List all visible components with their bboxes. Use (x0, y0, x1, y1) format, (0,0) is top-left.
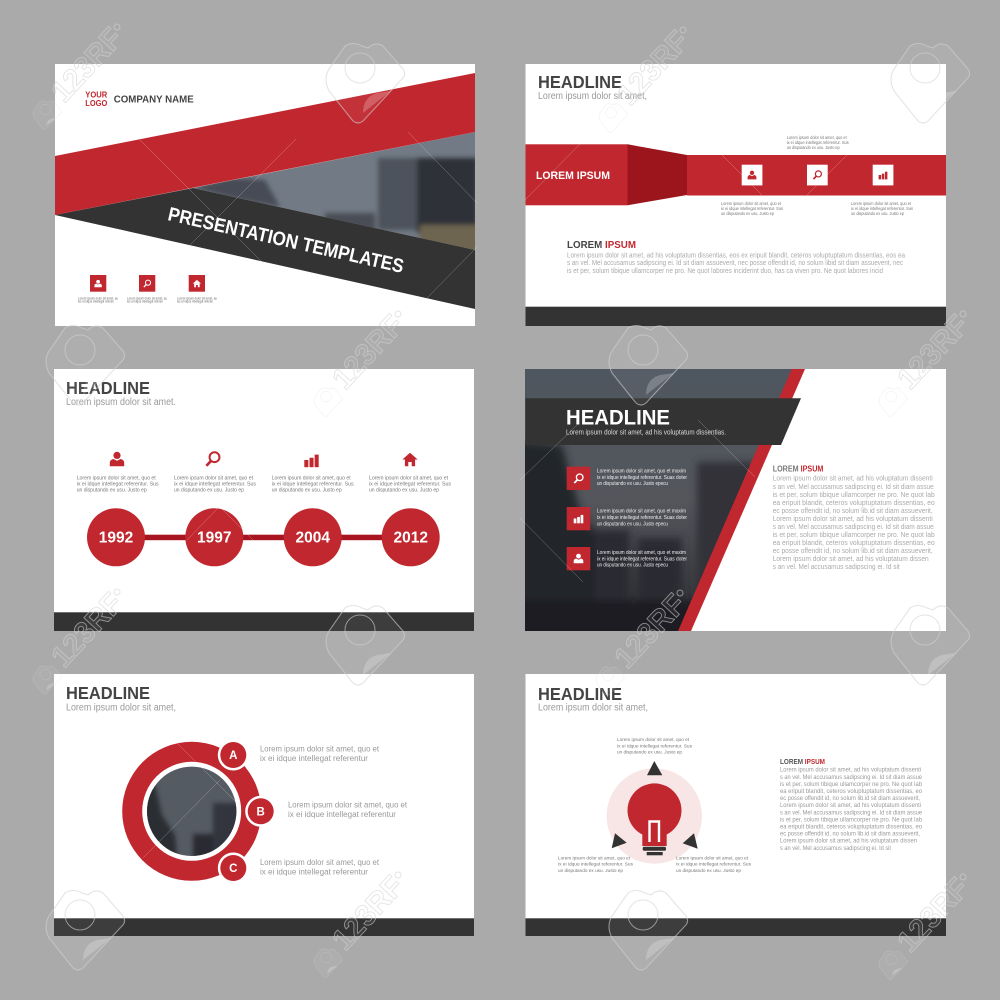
watermark: stock logo text: 123RF (891, 872, 975, 959)
lower caption right: un disputando ex usu. Justo ep (851, 211, 905, 216)
logo: YOUR (85, 90, 107, 100)
body paragraph (773, 476, 935, 571)
badge A (218, 740, 249, 770)
cover captions: Lorem ipsum dolor sit amet, au (177, 296, 217, 300)
captions: ix ei idque intellegat referentur. Sus (174, 482, 256, 488)
panel: cover slide (55, 64, 480, 326)
icon: search tile (567, 467, 590, 490)
bottom left caption: Lorem ipsum dolor sit amet, quo et (558, 855, 631, 861)
top caption: un disputando ex usu. Justo ep (787, 145, 840, 150)
body paragraph: ea eripuit blandit, ceteros voluptuptatum dissentias, eo (780, 789, 923, 795)
subtitle: Lorem ipsum dolor sit amet, (66, 703, 176, 714)
list captions: ix ei idque intellegat referentur. Suas doter (597, 556, 687, 562)
icon: home tile (189, 275, 205, 292)
headline: HEADLINE (66, 683, 150, 703)
body paragraph: ea eripuit blandit, ceteros voluptuptatum dissentias, eo (773, 500, 935, 507)
pale circle (607, 768, 702, 864)
body paragraph: Lorem ipsum dolor sit amet, ad his voluptatum dissentias, eos ex eripuit blandit, ceteros voluptuptatum dissentias, eos ea (567, 252, 905, 260)
white inner ring (142, 762, 241, 861)
icon: chart (304, 455, 319, 467)
text C (260, 858, 380, 877)
cover captions: ius et idque intellegat referen (127, 300, 163, 304)
captions: ix ei idque intellegat referentur. Sus (272, 482, 354, 488)
dark banner (526, 398, 801, 445)
list captions: Lorem ipsum dolor sit amet, quo et maxim (597, 509, 686, 515)
watermark: stock logo text: 123RF (611, 25, 695, 112)
body paragraph: s an vel. Mel accusamus sadipscing ei. Id sit diam assueverit, nec posse offendit id, no solum libid sit diam assueverit, nec (567, 260, 903, 267)
text C: ix ei idque intellegat referentur (260, 868, 368, 877)
badge C: C (229, 863, 237, 875)
list captions: Lorem ipsum dolor sit amet, quo et maxim (597, 469, 686, 475)
body paragraph: ea eripuit blandit, ceteros voluptuptatum dissentias, eo (780, 824, 923, 830)
body paragraph: ec posse offendit id, no solum lib.id sit diam assueverit, (780, 832, 920, 838)
captions: ix ei idque intellegat referentur. Sus (369, 482, 451, 488)
body paragraph: ec posse offendit id, no solum lib.id sit diam assueverit, (773, 508, 933, 515)
headline: HEADLINE (66, 378, 150, 398)
body paragraph: Lorem ipsum dolor sit amet, ad his voluptatum dissenti (780, 803, 921, 809)
red band (687, 155, 946, 196)
circular photo (147, 766, 236, 856)
body paragraph: s an vel. Mel accusamus sadipscing ei. Id sit (780, 846, 891, 852)
section heading: LOREM IPSUM (780, 759, 825, 766)
bottom right caption: un disputando ex usu. Justo ep (676, 868, 741, 874)
captions: un disputando ex usu. Justo ep (174, 488, 244, 494)
subtitle: Lorem ipsum dolor sit amet, ad his voluptatum dissentias. (566, 427, 726, 436)
top caption: un disputando ex usu. Justo ep (617, 750, 682, 756)
icon: person tile (90, 275, 106, 292)
badge B (245, 796, 276, 827)
watermark: stock logo text: 123RF (45, 587, 129, 674)
subtitle: Lorem ipsum dolor sit amet. (66, 397, 176, 408)
dark diagonal band (55, 188, 475, 309)
timeline node 1992: 1992 (99, 530, 133, 546)
list captions: Lorem ipsum dolor sit amet, quo et maxim (597, 550, 686, 556)
lower caption left (721, 201, 783, 216)
panel: photo list slide (515, 369, 946, 640)
footer bar (54, 612, 474, 631)
subtitle: Lorem ipsum dolor sit amet, (538, 703, 648, 714)
lower caption right: Lorem ipsum dolor sit amet, quo et (851, 201, 912, 206)
red diagonal band (55, 73, 475, 215)
captions: un disputando ex usu. Justo ep (369, 488, 439, 494)
body paragraph: is et per, solum tibique ullamcorper ne pro. Ne quot lab (780, 817, 923, 823)
cover captions: Lorem ipsum dolor sit amet, au (127, 296, 167, 300)
cover photo (190, 130, 480, 255)
body paragraph: Lorem ipsum dolor sit amet, ad his voluptatum dissenti (780, 768, 921, 774)
captions: Lorem ipsum dolor sit amet, quo et (174, 475, 254, 481)
body paragraph: is et per, solum tibique ullamcorper ne pro. Ne quot labores inciderint duo, has ca viven pro. Ne quot labores incid (567, 268, 883, 275)
logo (85, 90, 108, 108)
text A: ix ei idque intellegat referentur (260, 754, 368, 763)
captions: un disputando ex usu. Justo ep (272, 488, 342, 494)
body paragraph: ea eripuit blandit, ceteros voluptuptatum dissentias, eo (773, 540, 935, 547)
body paragraph: s an vel. Mel accusamus sadipscing ei. Id sit diam assue (773, 484, 934, 491)
list captions: un disputando ex usu. Justo epecu (597, 481, 668, 487)
body paragraph (567, 252, 905, 275)
footer bar (526, 307, 946, 326)
bottom left caption: un disputando ex usu. Justo ep (558, 868, 623, 874)
top caption (617, 737, 693, 756)
bottom left caption: ix ei idque intellegat referentur. Sus (558, 862, 634, 868)
panel: circle diagram slide (54, 674, 474, 936)
lower caption left: ix ei idque intellegat referentur. Sus (721, 206, 783, 211)
headline: HEADLINE (566, 405, 670, 429)
body paragraph: is et per, solum tibique ullamcorper ne pro. Ne quot lab (780, 782, 923, 788)
watermark: stock logo text: 123RF (326, 870, 410, 957)
list captions: un disputando ex usu. Justo epecu (597, 521, 668, 527)
headline: HEADLINE (538, 72, 622, 92)
icon: search tile (139, 275, 155, 292)
top caption: ix ei idque intellegat referentur. Sus (617, 743, 693, 749)
panel: light bulb slide (526, 674, 946, 936)
icon: person tile (567, 547, 590, 570)
lower caption left: Lorem ipsum dolor sit amet, quo et (721, 201, 782, 206)
timeline node 1992 (87, 508, 145, 566)
timeline connector (116, 535, 410, 540)
watermark: stock logo text: 123RF (608, 588, 692, 675)
timeline node 2004: 2004 (295, 530, 330, 546)
watermark: stock logo text: 123RF (326, 309, 410, 396)
captions: un disputando ex usu. Justo ep (77, 488, 147, 494)
bottom right caption: ix ei idque intellegat referentur. Sus (676, 862, 752, 868)
icon: person tile (742, 165, 762, 185)
icon: search tile (807, 165, 828, 185)
text B: Lorem ipsum dolor sit amet, quo et (288, 800, 408, 809)
background photo (525, 369, 792, 631)
bottom right caption: Lorem ipsum dolor sit amet, quo et (676, 855, 749, 861)
top caption: Lorem ipsum dolor sit amet, quo et (617, 737, 690, 743)
red ring (122, 742, 261, 881)
dark red connector (628, 144, 687, 205)
text C: Lorem ipsum dolor sit amet, quo et (260, 858, 380, 867)
list captions: un disputando ex usu. Justo epecu (597, 563, 668, 569)
body paragraph: Lorem ipsum dolor sit amet, ad his voluptatum dissenti (773, 516, 933, 523)
footer bar (54, 918, 474, 936)
captions: Lorem ipsum dolor sit amet, quo et (77, 475, 156, 481)
top caption (787, 135, 849, 150)
section heading: LOREM IPSUM (567, 239, 636, 251)
badge C (218, 852, 249, 884)
top caption: Lorem ipsum dolor sit amet, quo et (787, 135, 847, 140)
cover captions: ius et idque intellegat referen (177, 300, 213, 304)
list captions: ix ei idque intellegat referentur. Suas doter (597, 475, 687, 481)
captions (77, 475, 451, 494)
footer bar (526, 918, 946, 936)
badge A: A (229, 750, 237, 762)
list captions (597, 469, 687, 569)
section heading: LOREM IPSUM (773, 465, 824, 474)
lower caption left: un disputando ex usu. Justo ep (721, 211, 775, 216)
lower caption right: ix ei idque intellegat referentur. Sus (851, 206, 913, 211)
body paragraph: s an vel. Mel accusamus sadipscing ei. Id sit diam assue (780, 810, 923, 816)
timeline node 2012: 2012 (393, 530, 428, 546)
text B: ix ei idque intellegat referentur (288, 810, 396, 819)
captions: Lorem ipsum dolor sit amet, quo et (369, 475, 449, 481)
timeline node 2012 (382, 508, 440, 566)
list captions: ix ei idque intellegat referentur. Suas doter (597, 515, 687, 521)
logo: LOGO (85, 98, 108, 108)
bottom left caption (558, 855, 634, 874)
body paragraph: is et per, solum tibique ullamcorper ne pro. Ne quot lab (773, 492, 935, 499)
cover captions: Lorem ipsum dolor sit amet, au (78, 296, 118, 300)
red label block (526, 144, 628, 205)
icon: person (110, 452, 124, 466)
body paragraph (780, 768, 923, 852)
arrow: right (683, 833, 698, 849)
timeline node 1997: 1997 (197, 530, 232, 546)
watermark: stock logo text: 123RF (891, 309, 975, 396)
panel: process band slide (526, 64, 946, 326)
icon: chart tile (567, 507, 590, 530)
subtitle: Lorem ipsum dolor sit amet, (538, 91, 647, 102)
body paragraph: s an vel. Mel accusamus sadipscing ei. Id sit diam assue (780, 775, 923, 781)
captions: Lorem ipsum dolor sit amet, quo et (272, 475, 351, 481)
body paragraph: s an vel. Mel accusamus sadipscing ei. Id sit diam assue (773, 524, 934, 531)
cover title: PRESENTATION TEMPLATES (166, 203, 406, 278)
badge B: B (257, 806, 265, 818)
body paragraph: ec posse offendit id, no solum lib.id sit diam assueverit, (780, 796, 920, 802)
body paragraph: Lorem ipsum dolor sit amet, ad his voluptatum dissen (780, 839, 917, 845)
icon: chart tile (873, 165, 893, 185)
body paragraph: is et per, solum tibique ullamcorper ne pro. Ne quot lab (773, 532, 935, 539)
timeline node 2004 (284, 508, 342, 566)
icon: home (402, 453, 418, 466)
bottom right caption (676, 855, 752, 874)
body paragraph: ec posse offendit id, no solum lib.id sit diam assueverit, (773, 548, 933, 555)
headline: HEADLINE (538, 684, 622, 704)
captions: ix ei idque intellegat referentur. Sus (77, 482, 159, 488)
lower caption right (851, 201, 913, 216)
text B (288, 800, 408, 819)
arrow: left (612, 833, 627, 848)
text A (260, 744, 380, 763)
cover captions (78, 296, 217, 304)
cover captions: ius et idque intellegat referen (78, 300, 114, 304)
company name: COMPANY NAME (114, 95, 194, 106)
text A: Lorem ipsum dolor sit amet, quo et (260, 744, 380, 753)
body paragraph: Lorem ipsum dolor sit amet, ad his voluptatum dissen (773, 556, 929, 563)
top caption: ix ei idque intellegat referentur. Sus (787, 140, 849, 145)
icon: light bulb (628, 783, 682, 855)
watermark: stock logo text: 123RF (45, 22, 129, 109)
panel: timeline slide (54, 369, 474, 631)
body paragraph: Lorem ipsum dolor sit amet, ad his voluptatum dissenti (773, 476, 933, 483)
arrow: top (647, 761, 662, 775)
icon: search (206, 452, 219, 466)
red diagonal stripe (678, 369, 805, 631)
label text: LOREM IPSUM (536, 170, 610, 182)
timeline node 1997 (185, 508, 243, 566)
body paragraph: s an vel. Mel accusamus sadipscing ei. Id sit (773, 564, 900, 571)
